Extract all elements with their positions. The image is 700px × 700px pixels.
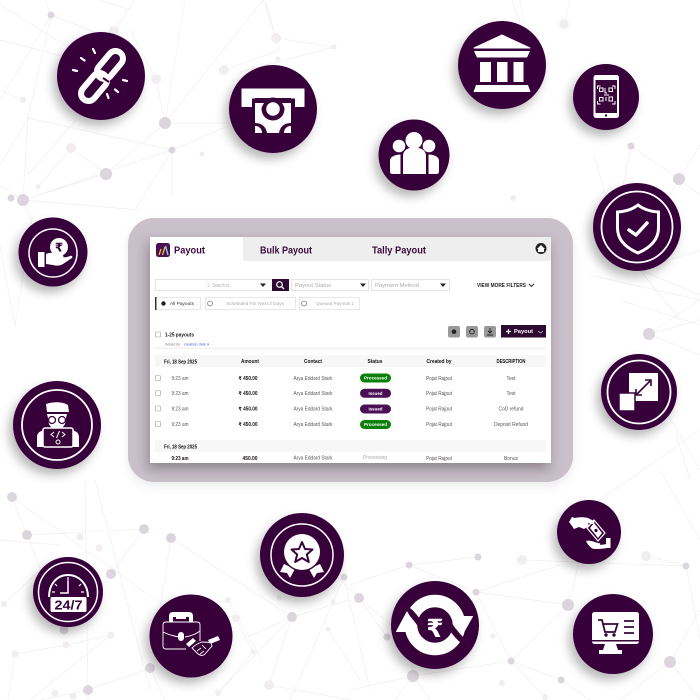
filter row: Payout Status [295, 283, 331, 289]
table row 3: Arya Eddard Stark [294, 407, 333, 413]
payout quick filters: All Payouts [170, 301, 195, 307]
table row 5 [172, 455, 518, 462]
list toolbar: creation date ▾ [184, 342, 209, 346]
icon: cash exchange hands [557, 500, 621, 564]
icon: briefcase and handshake [150, 594, 232, 678]
payout table: Status [368, 359, 383, 365]
table row 2: Issued [368, 391, 383, 396]
tab bar [150, 237, 551, 261]
table row 4: Pojat Rajput [426, 422, 453, 428]
device frame [128, 218, 573, 482]
payout quick filters [155, 297, 360, 310]
icon: online shopping monitor [573, 594, 653, 674]
table row 5: 450.00 [242, 456, 258, 462]
icon: cash dispenser [229, 65, 317, 153]
payout table: Contact [304, 359, 322, 365]
payout table [155, 355, 546, 462]
icon: QR code phone [573, 64, 639, 130]
filter row [156, 279, 534, 291]
table row 1: Processed [364, 376, 387, 381]
payout table: Fri, 18 Sep 2025 [164, 359, 197, 365]
table row 2: Pojat Rajput [426, 391, 453, 397]
table row 3: 9:23 am [172, 407, 188, 413]
table row 5: Arya Eddard Stark [294, 456, 333, 462]
payout table: DESCRIPTION [496, 359, 526, 365]
payout quick filters: Queued Payouts 1 [316, 301, 354, 307]
table row 1: Pojat Rajput [426, 376, 453, 382]
payout table: Amount [241, 359, 259, 365]
icon: rupee refresh cycle [391, 581, 479, 669]
icon: broken link [57, 32, 145, 120]
table row 4: ₹ 450.00 [238, 422, 258, 428]
table row 5: Pojat Rajput [426, 456, 453, 462]
table row 2: 9:23 am [172, 391, 188, 397]
table row 5: Bonus [504, 456, 518, 462]
table row 2: Test [506, 391, 516, 397]
table row 5: Processing [363, 455, 387, 461]
list toolbar [155, 325, 546, 349]
icon: 24/7 clock: 24/7 [54, 598, 82, 612]
table row 3: Pojat Rajput [426, 407, 453, 413]
table row 2: Arya Eddard Stark [294, 391, 333, 397]
table row 5: 9:23 am [172, 456, 189, 462]
table row 1: ₹ 450.00 [238, 376, 258, 382]
table row 1: Test [506, 376, 516, 382]
table row 4: Processed [364, 422, 387, 427]
icon: bank [458, 21, 546, 109]
table row 4: Deposit Refund [494, 422, 528, 428]
tab bar: Tally Payout [372, 244, 426, 256]
table row 4: 9:23 am [172, 422, 188, 428]
table row 3 [156, 404, 524, 414]
table row 1 [156, 374, 516, 382]
table row 4 [156, 420, 528, 429]
icon: developer with laptop [13, 381, 101, 469]
table row 2: ₹ 450.00 [238, 391, 258, 397]
table row 3: Issued [368, 407, 383, 412]
icon: resize arrows [601, 354, 677, 430]
payout table: Fri, 18 Sep 2025 [164, 444, 197, 450]
table row 3: ₹ 450.00 [238, 407, 258, 413]
table row 1: Arya Eddard Stark [294, 376, 333, 382]
icon: rupee refresh cycle: ₹ [426, 614, 444, 643]
icon: rupee in hand [18, 218, 88, 286]
filter row: Payment Method [375, 283, 419, 289]
tab bar: Bulk Payout [260, 244, 312, 256]
tab bar: Payout [174, 244, 205, 256]
table row 3: CoD refund [498, 407, 524, 413]
filter row: 1 · Search in... [207, 283, 232, 289]
list toolbar: 1-25 payouts [165, 332, 194, 338]
table row 1: 9:23 am [172, 376, 188, 382]
payout quick filters: Scheduled For Next 2 Days [226, 301, 285, 307]
table row 2 [156, 389, 516, 398]
icon: 24/7 clock [33, 557, 103, 627]
payout table: Created by [426, 359, 452, 365]
icon: security shield [593, 183, 681, 271]
filter row: VIEW MORE FILTERS [477, 283, 526, 289]
icon: people group [378, 120, 450, 190]
list toolbar: Payout [514, 329, 533, 335]
icon: award medal [260, 513, 344, 597]
icon: rupee in hand: ₹ [55, 240, 63, 254]
list toolbar: Sorted by [165, 342, 180, 346]
table row 4: Arya Eddard Stark [294, 422, 333, 428]
